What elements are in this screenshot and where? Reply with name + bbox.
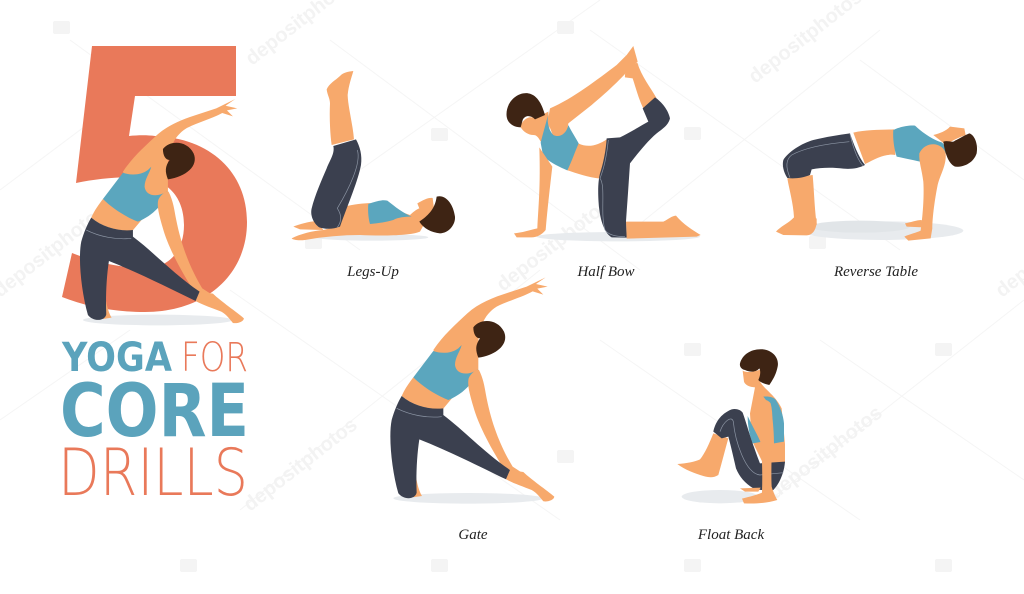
caption: Legs-Up: Legs-Up: [346, 264, 399, 280]
title: Yoga for Core Drills: [58, 335, 249, 511]
big number 5: [62, 46, 247, 312]
title: Yoga for Core Drills: CORE: [60, 369, 249, 454]
caption: Gate: Gate: [458, 527, 488, 543]
figure: gate pose: [390, 277, 554, 504]
figure: half bow pose: [507, 46, 701, 241]
watermark layer: depositphotos: [493, 194, 615, 296]
figure: reverse table pose: [776, 126, 977, 241]
title: Yoga for Core Drills: YOGA: [61, 335, 172, 381]
figure: legs-up pose: [292, 71, 455, 241]
figure: float back pose: [677, 349, 785, 504]
title: Yoga for Core Drills: FOR: [181, 335, 248, 381]
watermark layer: depositphotos: [765, 402, 887, 504]
figure: hero gate pose: [80, 99, 244, 325]
caption: Half Bow: Half Bow: [576, 264, 635, 280]
title: Yoga for Core Drills: DRILLS: [58, 436, 248, 511]
caption: Reverse Table: Reverse Table: [833, 264, 918, 280]
watermark layer: depositphotos: [240, 414, 362, 516]
caption: Float Back: Float Back: [697, 527, 764, 543]
